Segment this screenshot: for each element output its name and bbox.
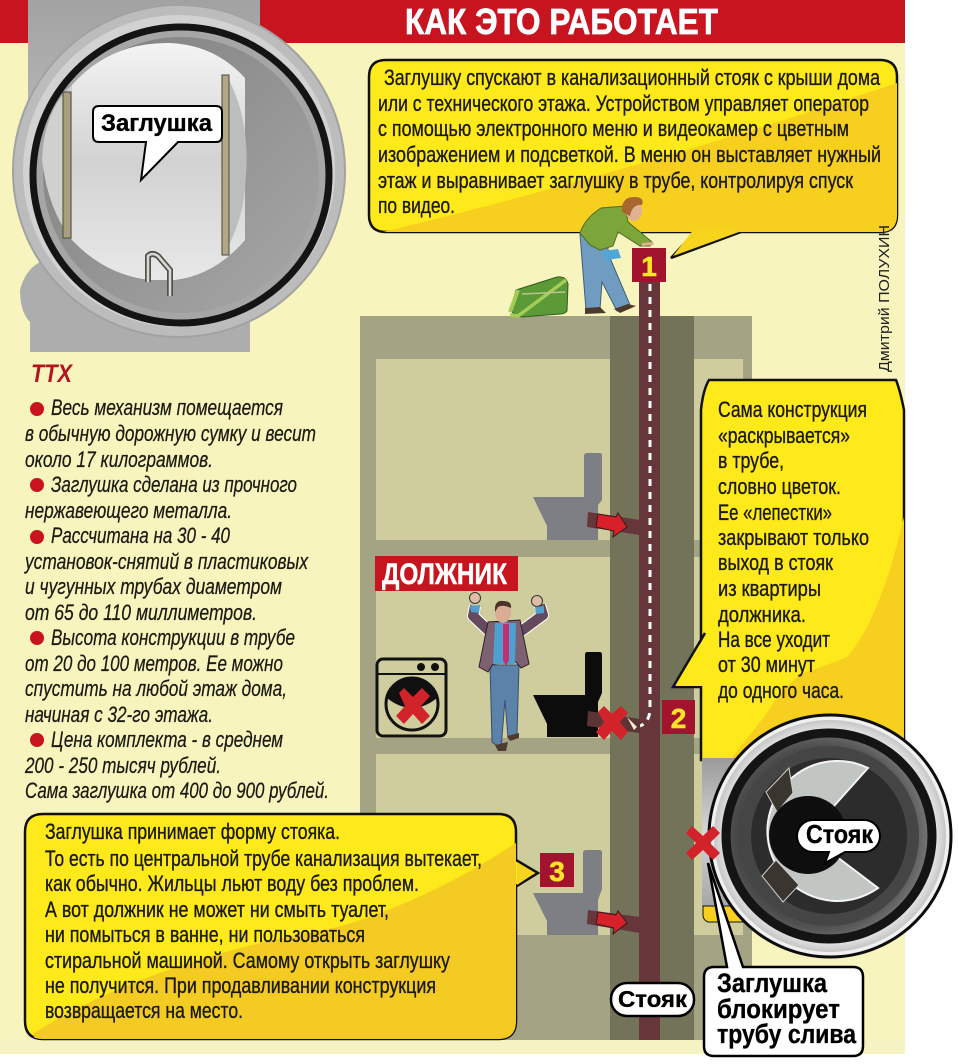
specs list bbox=[23, 360, 329, 803]
spec text: в обычную дорожную сумку и весит bbox=[25, 421, 316, 446]
spec text: Сама заглушка от 400 до 900 рублей. bbox=[25, 778, 329, 803]
step 3 text: стиральной машиной. Самому открыть заглушку bbox=[45, 948, 450, 973]
step 1 text: с помощью электронного меню и видеокамер с цветным bbox=[378, 116, 849, 141]
step 1 text bbox=[378, 65, 881, 218]
step 3 text: как обычно. Жильцы льют воду без проблем. bbox=[45, 871, 419, 896]
number 3 badge bbox=[540, 853, 574, 887]
step 2 text: выход в стояк bbox=[718, 550, 833, 575]
step 3 text: не получится. При продавливании конструкция bbox=[45, 973, 436, 998]
label: plug bubble: Заглушка bbox=[101, 110, 213, 137]
step 2 text: должника. bbox=[718, 602, 806, 627]
number 1 badge bbox=[632, 248, 666, 282]
worker tablet bbox=[603, 249, 621, 260]
callout: step 3 bbox=[25, 814, 538, 1039]
plug petals bbox=[767, 761, 878, 901]
worker head bbox=[622, 197, 643, 221]
spec text bbox=[23, 395, 329, 803]
dashed plug cable bbox=[640, 284, 650, 726]
spec text: 200 - 250 тысяч рублей. bbox=[24, 753, 221, 778]
icon: hinges bbox=[762, 768, 799, 902]
spec text: Высота конструкции в трубе bbox=[51, 625, 295, 650]
spec text: Рассчитана на 30 - 40 bbox=[51, 523, 231, 548]
step 3 text: То есть по центральной трубе канализация вытекает, bbox=[45, 846, 482, 871]
photo: plug inside pipe bbox=[13, 0, 345, 352]
label: plug blocks drain: Заглушка bbox=[717, 968, 828, 998]
step 2 text: до одного часа. bbox=[718, 678, 844, 703]
worker torso bbox=[580, 206, 652, 250]
spec text: установок-снятий в пластиковых bbox=[23, 549, 309, 574]
label: riser bubble: Стояк bbox=[806, 819, 874, 849]
pipe stub behind detail bbox=[702, 758, 762, 922]
label: plug blocks drain: трубу слива bbox=[717, 1019, 857, 1049]
debtor figure bbox=[470, 592, 544, 751]
spec text: начиная с 32-го этажа. bbox=[25, 702, 213, 727]
step 2 text: словно цветок. bbox=[718, 474, 841, 499]
toilet: lower floor bbox=[533, 850, 602, 935]
step 3 text: Заглушка принимает форму стояка. bbox=[45, 819, 340, 844]
step 3 text: А вот должник не может ни смыть туалет, bbox=[45, 897, 389, 922]
label: riser bubble bbox=[797, 819, 880, 863]
spec text: около 17 килограммов. bbox=[25, 447, 213, 472]
label: plug bubble bbox=[93, 106, 222, 180]
spec text: от 20 до 100 метров. Ее можно bbox=[25, 651, 283, 676]
worker with bag bbox=[510, 197, 654, 317]
step 3 text: возвращается на место. bbox=[45, 998, 243, 1023]
callout: step 2 bbox=[673, 380, 904, 760]
label: riser: Стояк bbox=[618, 986, 688, 1012]
step 3 text bbox=[45, 819, 482, 1023]
number 3 badge: 3 bbox=[549, 856, 565, 887]
step 2 text: закрывают только bbox=[718, 525, 869, 550]
spec text: от 65 до 110 миллиметров. bbox=[25, 600, 257, 625]
spec text: Цена комплекта - в среднем bbox=[51, 727, 283, 752]
spec text: нержавеющего металла. bbox=[25, 498, 232, 523]
riser pipe bbox=[639, 282, 660, 1040]
icon: blocked washing machine bbox=[377, 659, 446, 736]
step 2 text: Ее «лепестки» bbox=[718, 500, 832, 525]
step 2 text: Сама конструкция bbox=[718, 397, 867, 422]
step 2 text bbox=[718, 397, 869, 703]
building cross-section bbox=[0, 316, 905, 1054]
step 1 text: этаж и выравнивает заглушку в трубе, контролируя спуск bbox=[378, 168, 853, 193]
spec text: и чугунных трубах диаметром bbox=[25, 574, 282, 599]
callout: step 1 bbox=[369, 60, 897, 258]
riser shaft bbox=[610, 316, 694, 1040]
drain arrow: lower floor bbox=[587, 910, 640, 934]
worker shoes bbox=[585, 304, 636, 314]
spec text: Весь механизм помещается bbox=[51, 395, 283, 420]
spec text: спустить на любой этаж дома, bbox=[25, 676, 287, 701]
step 3 text: ни помыться в ванне, ни пользоваться bbox=[45, 922, 365, 947]
number 2 badge bbox=[662, 700, 695, 734]
toilet: debtor floor (black) bbox=[533, 652, 602, 737]
spec text: Заглушка сделана из прочного bbox=[51, 472, 297, 497]
spec bullets bbox=[30, 402, 44, 747]
step 2 text: «раскрывается» bbox=[718, 423, 850, 448]
number 2 badge: 2 bbox=[671, 703, 686, 734]
title: КАК ЭТО РАБОТАЕТ bbox=[405, 1, 718, 42]
specs heading: ТТХ bbox=[31, 360, 73, 388]
drain arrow: upper floor bbox=[587, 512, 640, 537]
title banner bbox=[0, 0, 905, 43]
riser opening bbox=[769, 796, 847, 874]
step 2 text: в трубе, bbox=[718, 448, 784, 473]
step 2 text: от 30 минут bbox=[718, 652, 815, 677]
label: plug blocks drain bbox=[704, 863, 863, 1056]
label: plug blocks drain: блокирует bbox=[717, 994, 840, 1024]
light strip under building bbox=[0, 1040, 905, 1054]
step 2 text: На все уходит bbox=[718, 627, 830, 652]
icon: bag bbox=[510, 277, 568, 317]
toilet: upper floor bbox=[533, 453, 602, 540]
worker trousers bbox=[580, 228, 630, 311]
label: riser bbox=[611, 983, 694, 1016]
blocked drain bbox=[587, 706, 640, 740]
author credit: Дмитрий ПОЛУХИН bbox=[876, 225, 893, 372]
number 1 badge: 1 bbox=[641, 251, 657, 282]
step 2 text: из квартиры bbox=[718, 576, 821, 601]
label: debtor: ДОЛЖНИК bbox=[382, 558, 508, 591]
step 1 text: по видео. bbox=[378, 193, 455, 218]
blocked outlet cross bbox=[686, 826, 720, 860]
riser detail circle bbox=[709, 715, 951, 957]
